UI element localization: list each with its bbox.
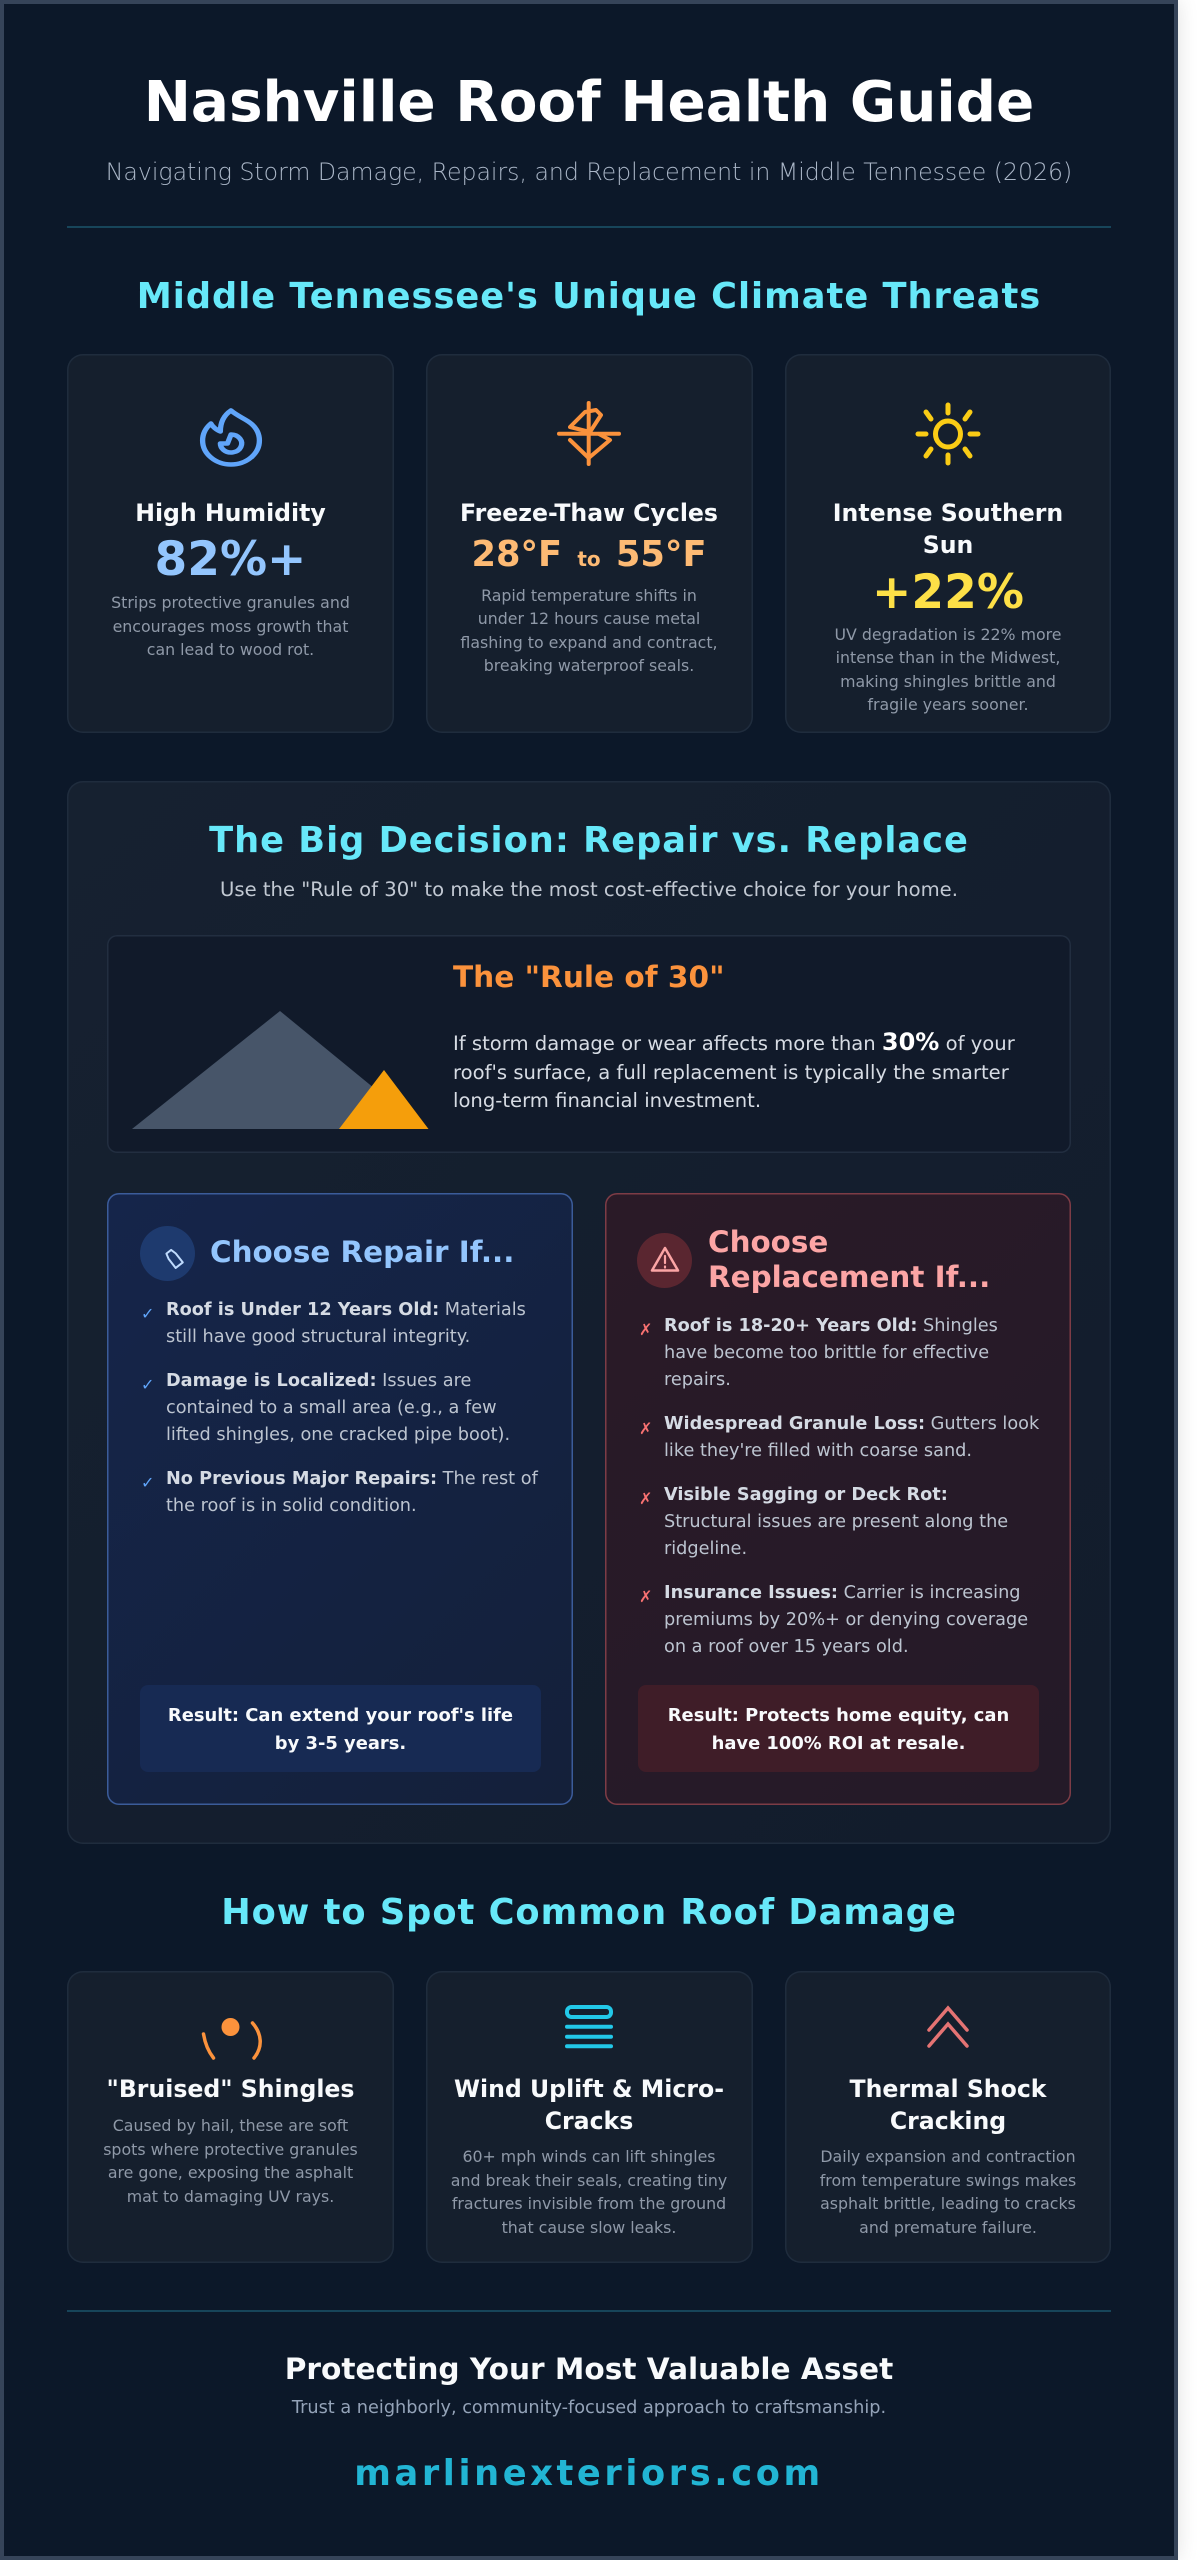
description: UV degradation is 22% more [834, 625, 1062, 644]
diagram: roof triangles [132, 1011, 428, 1129]
heading: replacement: Replacement If... [708, 1260, 990, 1294]
heading: replacement: Choose [708, 1225, 828, 1259]
description [111, 593, 350, 659]
icon: repair [140, 1226, 195, 1281]
panel: high humidity [67, 354, 394, 733]
list item [664, 1582, 1028, 1657]
list item: No Previous Major Repairs: The rest of [166, 1468, 538, 1488]
panel: bruised shingles [67, 1971, 394, 2263]
subtitle: Navigating Storm Damage, Repairs, and Replacement in Middle Tennessee (2026) [106, 158, 1072, 186]
description [451, 2147, 727, 2237]
description: spots where protective granules [103, 2140, 358, 2159]
rule text: If storm damage or wear affects more than 30% of your [453, 1028, 1015, 1056]
icon: freeze-thaw [557, 401, 621, 466]
rule text: long-term financial investment. [453, 1089, 761, 1112]
list item: Structural issues are present along the [664, 1512, 1008, 1532]
description: flashing to expand and contract, [460, 633, 718, 652]
list item [664, 1414, 1040, 1461]
cross mark: ✗ [639, 1320, 652, 1339]
panel: choose replacement [605, 1193, 1071, 1805]
card heading: Sun [923, 530, 973, 558]
description: asphalt brittle, leading to cracks [820, 2194, 1076, 2213]
heading: repair: Choose Repair If... [210, 1235, 514, 1269]
icon: sun [916, 402, 980, 466]
description: 60+ mph winds can lift shingles [462, 2147, 716, 2166]
heading: roof damage: How to Spot Common Roof Damage [221, 1892, 957, 1933]
panel: southern sun [785, 354, 1111, 733]
list item: Widespread Granule Loss: Gutters look [664, 1414, 1039, 1434]
card heading: Freeze-Thaw Cycles [460, 498, 718, 526]
description [460, 586, 718, 675]
cross mark: ✗ [639, 1587, 652, 1606]
stat: 82%+ [155, 532, 306, 587]
description: from temperature swings makes [820, 2171, 1076, 2190]
panel: wind uplift [426, 1971, 752, 2263]
title: Nashville Roof Health Guide [144, 70, 1034, 135]
card heading: Cracks [545, 2107, 633, 2135]
card heading: "Bruised" Shingles [107, 2075, 354, 2103]
card heading [454, 2075, 724, 2135]
description: breaking waterproof seals. [484, 656, 694, 675]
description: encourages moss growth that [113, 617, 348, 636]
rule text [453, 1028, 1015, 1112]
list item: on a roof over 15 years old. [664, 1637, 909, 1657]
list item: have become too brittle for effective [664, 1343, 989, 1363]
stat: +22% [872, 565, 1024, 620]
description: mat to damaging UV rays. [127, 2187, 334, 2206]
list item: Roof is Under 12 Years Old: Materials [166, 1300, 526, 1320]
card heading [833, 498, 1063, 558]
heading: replacement [708, 1225, 990, 1294]
rule heading: The "Rule of 30" [453, 960, 725, 994]
card heading: Cracking [890, 2107, 1006, 2135]
result box: have 100% ROI at resale. [712, 1733, 965, 1754]
card heading: High Humidity [135, 498, 326, 526]
card heading: Wind Uplift & Micro- [454, 2075, 724, 2103]
list item [166, 1300, 526, 1347]
stat: 28°F to 55°F [471, 534, 707, 575]
intro text: Use the "Rule of 30" to make the most cost-effective choice for your home. [220, 878, 958, 901]
description: can lead to wood rot. [147, 640, 314, 659]
cross mark: ✗ [639, 1489, 652, 1508]
description: and premature failure. [859, 2218, 1037, 2237]
list item: like they're filled with coarse sand. [664, 1441, 972, 1461]
description: fractures invisible from the ground [452, 2194, 726, 2213]
heading: climate threats: Middle Tennessee's Unique Climate Threats [137, 276, 1041, 317]
list item: Damage is Localized: Issues are [166, 1370, 471, 1390]
check mark: ✓ [141, 1473, 154, 1492]
result box: Result: Can extend your roof's life [168, 1705, 513, 1726]
panel: freeze-thaw [426, 354, 752, 733]
list item: Visible Sagging or Deck Rot: [664, 1484, 948, 1504]
result box [638, 1685, 1039, 1772]
list item [166, 1468, 538, 1516]
description: fragile years sooner. [867, 695, 1029, 714]
card heading: Intense Southern [833, 498, 1063, 526]
rule text: roof's surface, a full replacement is typically the smarter [453, 1060, 1009, 1084]
panel: thermal shock [785, 1971, 1111, 2263]
card heading [849, 2075, 1047, 2135]
icon: hail bruise [202, 2018, 262, 2060]
result box: Result: Protects home equity, can [668, 1705, 1009, 1726]
description: Daily expansion and contraction [820, 2147, 1076, 2166]
description [103, 2116, 358, 2206]
list item: premiums by 20%+ or denying coverage [664, 1610, 1028, 1630]
list item [664, 1484, 1008, 1559]
panel: the big decision [67, 781, 1111, 1844]
website: marlinexteriors.com [354, 2453, 824, 2494]
description: intense than in the Midwest, [836, 648, 1060, 667]
list item: ridgeline. [664, 1539, 747, 1559]
description: under 12 hours cause metal [478, 609, 700, 628]
list item: Roof is 18-20+ Years Old: Shingles [664, 1316, 998, 1336]
list item: still have good structural integrity. [166, 1327, 470, 1347]
list item [664, 1316, 998, 1390]
heading: big decision: The Big Decision: Repair vs. Replace [209, 820, 969, 861]
check mark: ✓ [141, 1304, 154, 1323]
callout: rule of 30 [107, 935, 1071, 1153]
footer heading: Protecting Your Most Valuable Asset [285, 2352, 893, 2386]
description: that cause slow leaks. [502, 2218, 676, 2237]
icon: humidity flame [200, 408, 262, 467]
list item: contained to a small area (e.g., a few [166, 1398, 497, 1418]
result box: by 3-5 years. [275, 1733, 406, 1754]
description: making shingles brittle and [840, 672, 1056, 691]
icon: chevrons [927, 2006, 969, 2048]
cross mark: ✗ [639, 1419, 652, 1438]
list item: lifted shingles, one cracked pipe boot). [166, 1425, 510, 1445]
description: are gone, exposing the asphalt [108, 2163, 353, 2182]
result box [140, 1685, 541, 1772]
description: and break their seals, creating tiny [451, 2171, 727, 2190]
list item [166, 1370, 510, 1445]
icon: wind layers [565, 2005, 613, 2048]
description [820, 2147, 1076, 2237]
description: Caused by hail, these are soft [113, 2116, 348, 2135]
list item: the roof is in solid condition. [166, 1496, 417, 1516]
icon: warning [637, 1233, 692, 1288]
description: Strips protective granules and [111, 593, 350, 612]
card heading: Thermal Shock [849, 2075, 1046, 2103]
footer tagline: Trust a neighborly, community-focused approach to craftsmanship. [292, 2398, 886, 2418]
description [834, 625, 1062, 714]
description: Rapid temperature shifts in [481, 586, 697, 605]
list item: repairs. [664, 1370, 731, 1390]
list item: Insurance Issues: Carrier is increasing [664, 1582, 1021, 1602]
panel: choose repair [107, 1193, 573, 1805]
check mark: ✓ [141, 1375, 154, 1394]
